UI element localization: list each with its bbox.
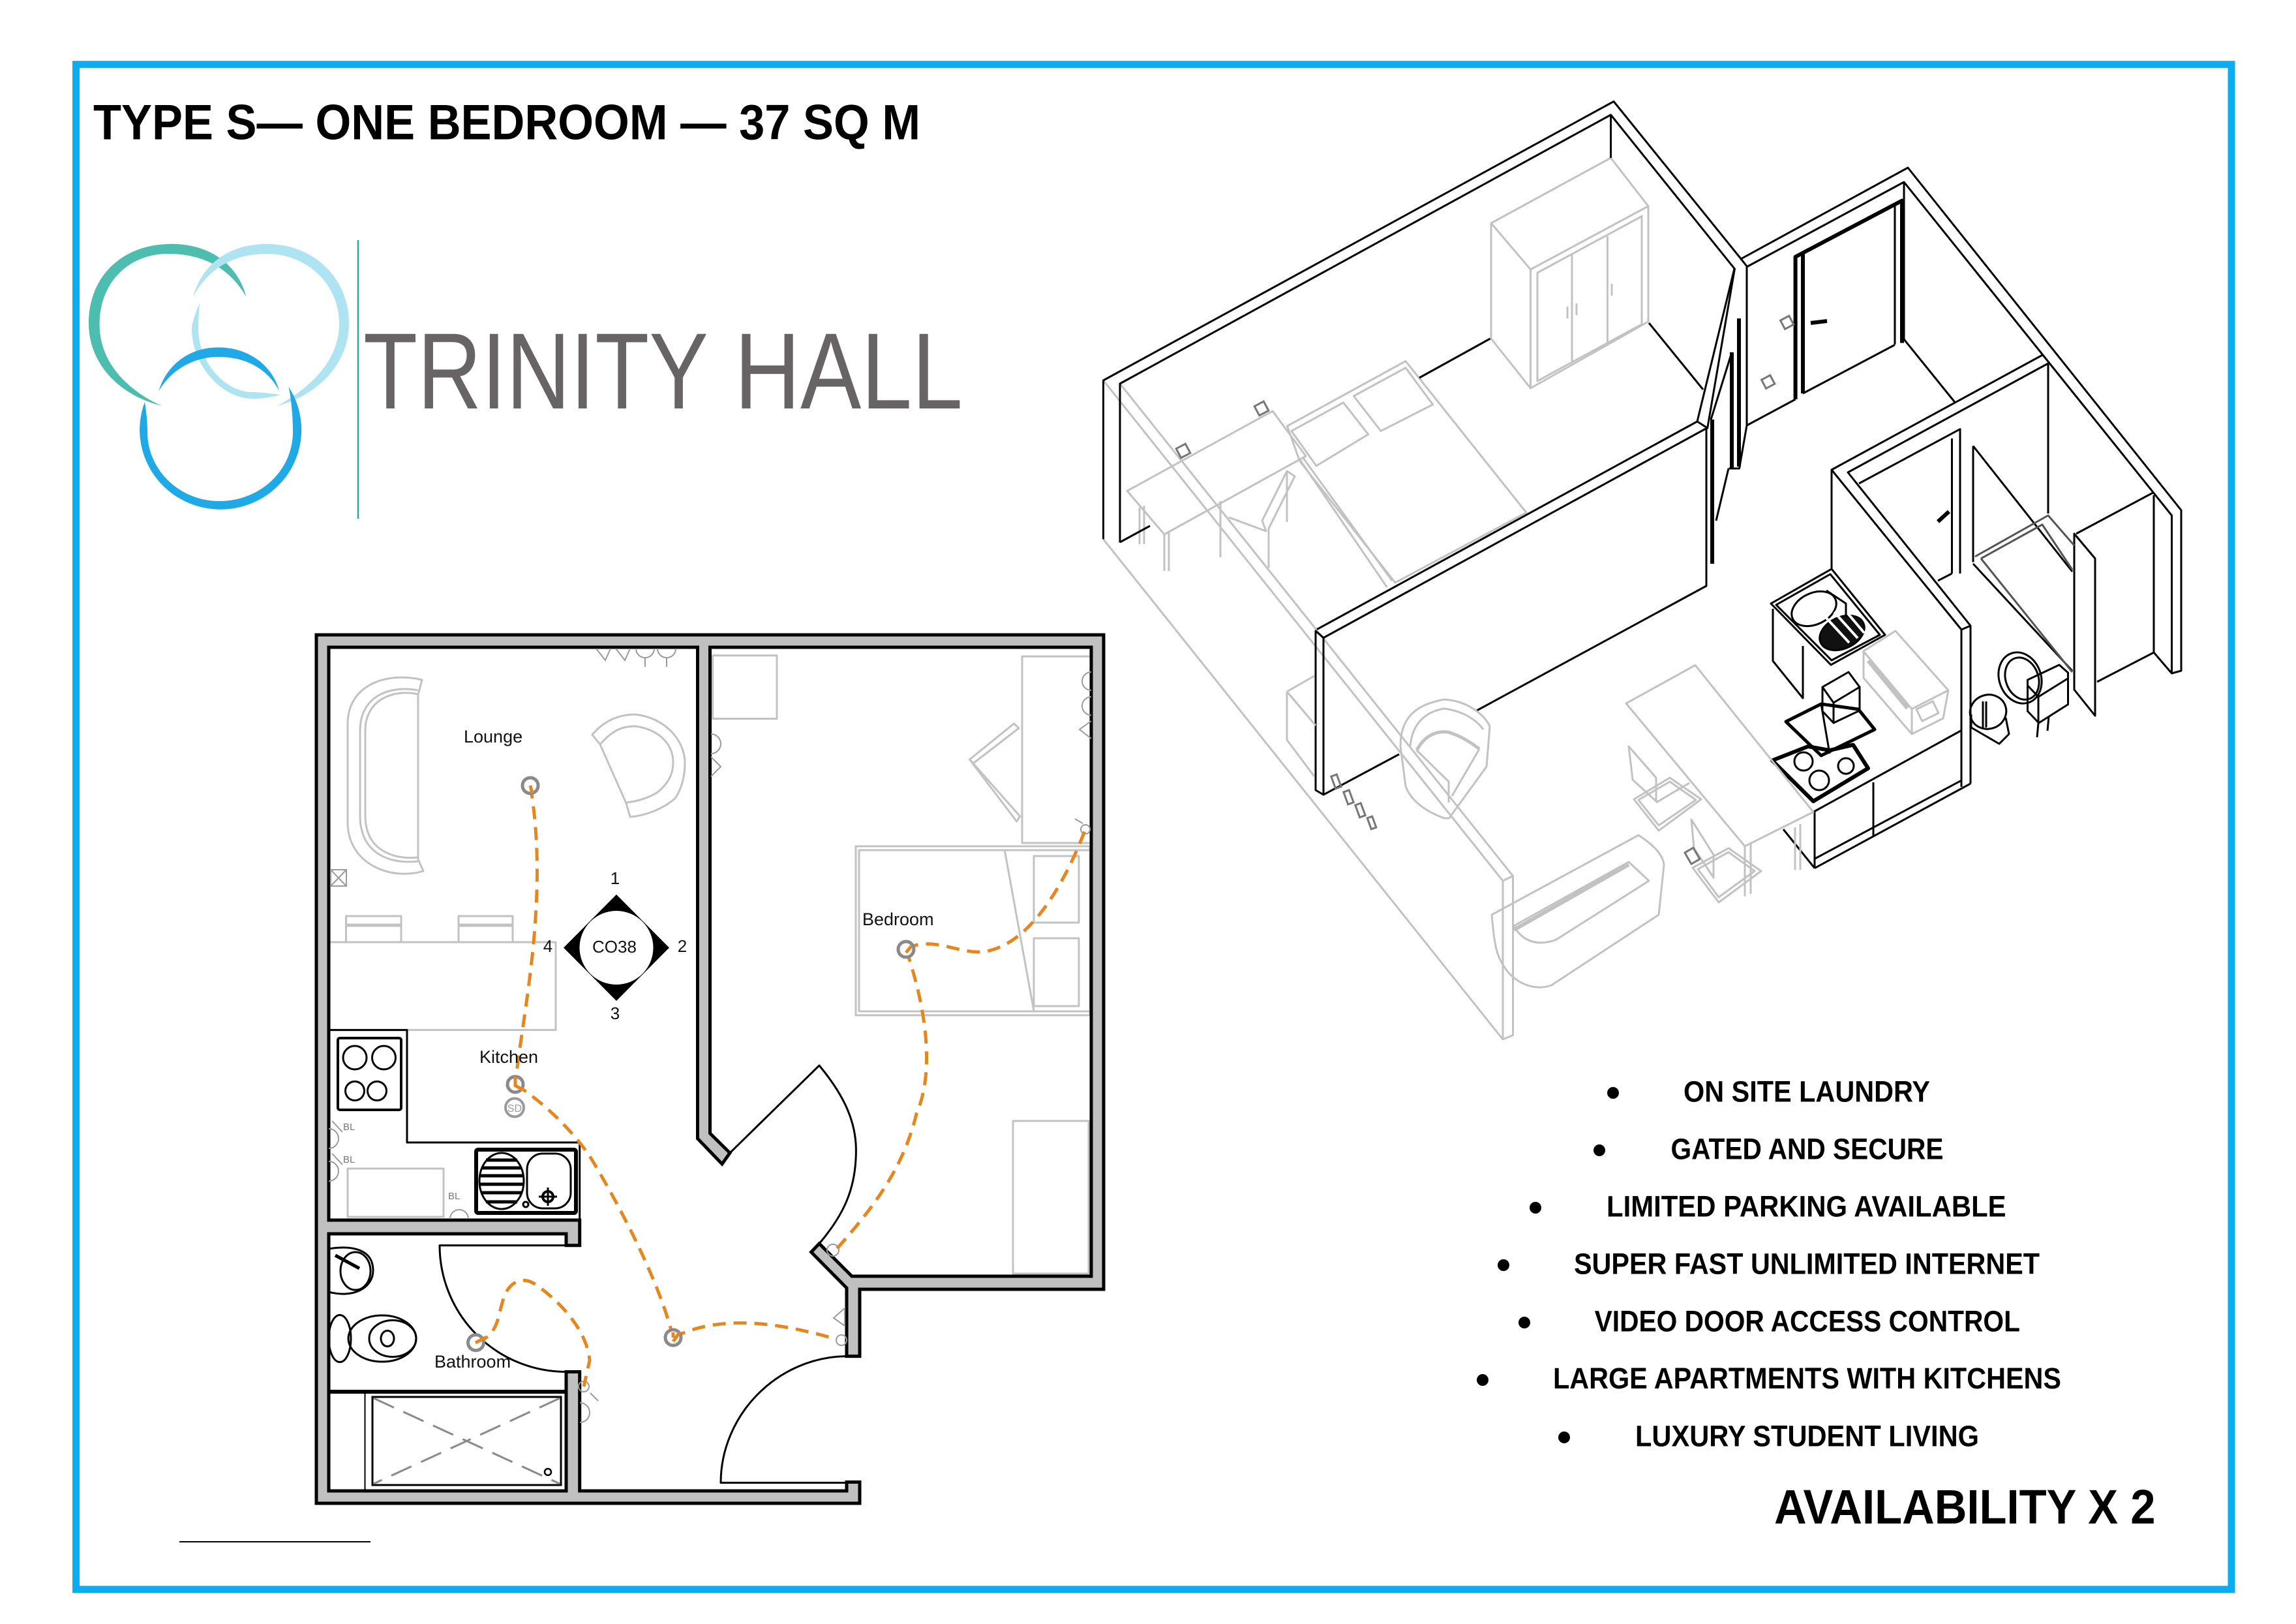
circuit labels: BL xyxy=(448,1191,460,1202)
circuit labels: BL xyxy=(343,1122,355,1133)
logo wordmark: TRINITY xyxy=(363,311,708,432)
availability callout: AVAILABILITY X 2 xyxy=(1774,1480,2155,1534)
feature: luxury student living: LUXURY STUDENT LIVING xyxy=(1635,1420,1979,1452)
section marker CO38: CO38 xyxy=(592,937,637,957)
iso bar table and stools xyxy=(1626,666,1813,902)
section marker CO38 xyxy=(543,868,687,1023)
kitchen sink xyxy=(476,1150,576,1213)
title: TYPE S— ONE BEDROOM — 37 SQ M xyxy=(93,95,920,150)
iso sink xyxy=(1771,569,1885,698)
double bed xyxy=(856,846,1090,1015)
breakfast bar and stools xyxy=(329,916,556,1030)
orange lighting circuits xyxy=(476,786,1085,1387)
bedroom cabinet xyxy=(713,656,777,719)
room labels xyxy=(434,727,934,1371)
ceiling light points xyxy=(468,778,914,1351)
kitchen appliance xyxy=(348,1169,444,1217)
logo wordmark: HALL xyxy=(734,311,963,432)
iso sofa xyxy=(1492,835,1664,987)
room labels: Lounge xyxy=(464,727,522,746)
iso kitchen counter xyxy=(1771,569,1971,868)
section marker CO38: 4 xyxy=(543,936,552,956)
iso sockets on wall xyxy=(1331,774,1376,829)
isometric 3D view xyxy=(1104,102,2181,1039)
iso outer walls xyxy=(1104,102,2181,795)
iso wardrobe xyxy=(1491,158,1648,388)
ceiling light points: SD xyxy=(507,1103,522,1114)
iso desk and chair xyxy=(1127,411,1306,571)
iso bed xyxy=(1287,361,1526,587)
bedroom furniture xyxy=(1127,158,1648,587)
feature: on site laundry: ON SITE LAUNDRY xyxy=(1684,1075,1930,1109)
shower tray xyxy=(329,1392,566,1491)
circuit labels xyxy=(343,1122,460,1202)
iso cabinet behind wall xyxy=(1287,676,1316,776)
feature list xyxy=(1477,1075,2061,1452)
section marker CO38: 3 xyxy=(611,1004,620,1023)
iso armchair xyxy=(1400,699,1490,818)
stool two xyxy=(1691,820,1761,902)
logo icon: three interlocking rings xyxy=(89,244,349,510)
iso cooker hood xyxy=(1786,672,1875,756)
toilet xyxy=(329,1315,416,1362)
bedroom desk and chair xyxy=(969,656,1091,843)
section marker CO38: 1 xyxy=(611,868,620,888)
room labels: Bedroom xyxy=(862,910,934,929)
room labels: Bathroom xyxy=(434,1352,511,1371)
feature: gated and secure: GATED AND SECURE xyxy=(1671,1133,1944,1165)
wardrobe xyxy=(1013,1121,1089,1274)
feature: limited parking: LIMITED PARKING AVAILABLE xyxy=(1607,1190,2006,1223)
floor plan xyxy=(179,635,1104,1542)
transparent front wall in grey xyxy=(1104,380,1513,1039)
lounge sofa xyxy=(348,677,423,874)
iso microwave xyxy=(1864,631,1948,734)
section marker CO38: 2 xyxy=(678,936,687,956)
lounge armchair xyxy=(592,714,685,817)
circuit labels: BL xyxy=(343,1154,355,1165)
hob xyxy=(338,1038,401,1110)
logo: Trinity Hall xyxy=(89,240,963,519)
furniture outlines xyxy=(329,656,1091,1274)
logo divider xyxy=(357,240,359,519)
doors with swing arcs xyxy=(440,1065,856,1482)
iso toilet and basin xyxy=(1965,646,2068,744)
wash basin xyxy=(329,1248,373,1294)
electrical symbols xyxy=(329,649,1091,1422)
feature: internet: SUPER FAST UNLIMITED INTERNET xyxy=(1574,1248,2040,1280)
walls xyxy=(316,635,1104,1503)
iso wall sockets xyxy=(1176,401,1269,458)
iso hob xyxy=(1772,745,1868,801)
room labels: Kitchen xyxy=(479,1047,538,1067)
iso shower tray xyxy=(1975,515,2074,672)
feature: large apartments: LARGE APARTMENTS WITH KITCHENS xyxy=(1553,1362,2061,1395)
feature: video door access: VIDEO DOOR ACCESS CONTROL xyxy=(1595,1305,2020,1338)
iso entrance door and open bedroom door xyxy=(1711,201,1902,564)
stool one xyxy=(1629,746,1701,831)
scale bar xyxy=(179,1541,370,1542)
iso bathroom block xyxy=(1832,355,2154,787)
kitchen counter outline xyxy=(329,1030,580,1220)
